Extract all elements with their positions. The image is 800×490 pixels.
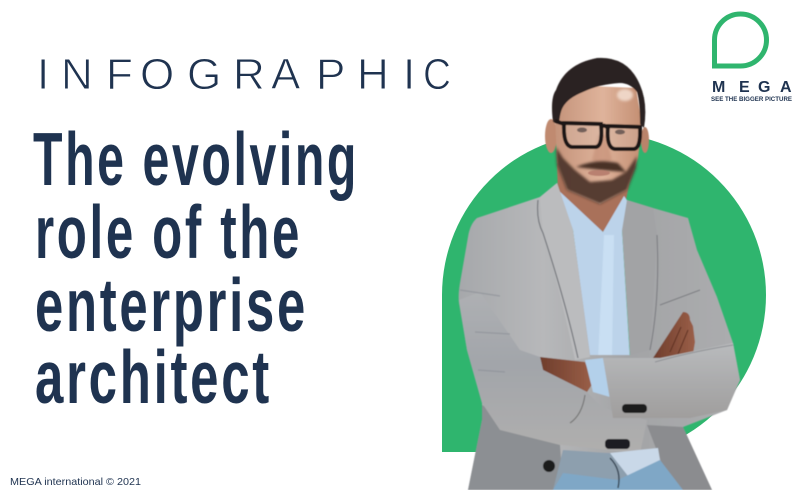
- green teardrop backdrop: [442, 133, 766, 457]
- left hand on arm: [540, 357, 593, 392]
- title: The evolving role of the enterprise architect: role of the: [35, 190, 302, 274]
- nose shadow: [592, 135, 612, 165]
- shirt: [556, 188, 636, 360]
- ear left: [545, 119, 557, 153]
- lips: [588, 170, 610, 176]
- cuff button upper: [622, 404, 647, 413]
- footer: copyright: MEGA international © 2021: [10, 476, 141, 488]
- neck: [557, 165, 632, 232]
- right fingers: [653, 312, 695, 362]
- lower jacket shading left: [468, 405, 563, 490]
- shirt cuff: [585, 358, 610, 397]
- jacket: [459, 183, 740, 490]
- beard: [556, 147, 637, 204]
- glasses: [555, 121, 640, 149]
- title: The evolving role of the enterprise architect: The evolving: [33, 117, 359, 201]
- lower sleeve: [459, 292, 647, 453]
- ear right: [641, 127, 649, 153]
- title: The evolving role of the enterprise architect: architect: [35, 335, 272, 419]
- jeans: [553, 460, 683, 490]
- icon: speech drop: [714, 14, 766, 66]
- cuff button lower: [605, 439, 630, 449]
- logo tagline: SEE THE BIGGER PICTURE: [711, 97, 792, 103]
- hair: [552, 58, 645, 128]
- upper sleeve: [603, 343, 740, 418]
- logo: MEGA: [711, 14, 792, 103]
- shirt bottom: [553, 450, 660, 490]
- label: INFOGRAPHIC: INFOGRAPHI: [37, 50, 415, 99]
- eyes: [577, 128, 625, 134]
- left lapel: [540, 183, 590, 360]
- photo: man with crossed arms: [459, 58, 740, 490]
- title: The evolving role of the enterprise architect: [33, 117, 359, 419]
- forehead highlight: [617, 89, 633, 101]
- right lapel: [623, 200, 657, 355]
- face: [555, 86, 642, 204]
- title: The evolving role of the enterprise architect: enterprise: [35, 263, 308, 347]
- label: INFOGRAPHIC: C: [423, 50, 451, 99]
- lower jacket right flap: [647, 425, 712, 490]
- logo wordmark: MEGA: [712, 79, 792, 96]
- jacket button: [543, 460, 555, 472]
